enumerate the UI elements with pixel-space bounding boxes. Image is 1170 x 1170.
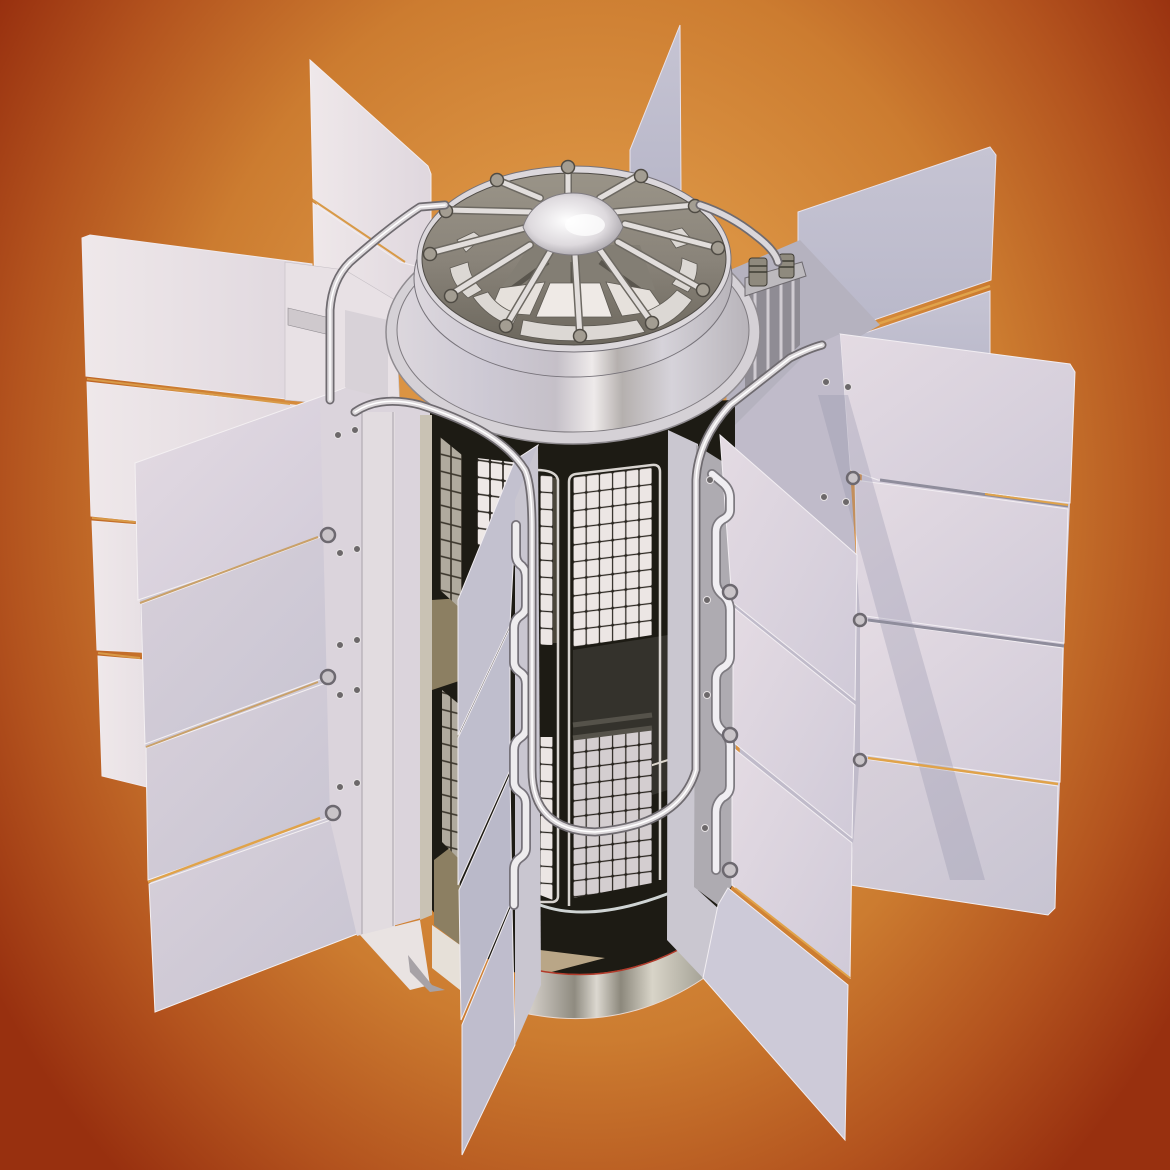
panel: left near fin: [135, 388, 432, 1012]
pipes: [330, 205, 822, 832]
battery grids: [440, 437, 700, 912]
panel: right near fin: [730, 334, 1075, 915]
left door: [458, 445, 541, 1155]
cylinder interior: [420, 400, 735, 985]
bottom ring: [519, 950, 704, 1019]
hub floor pieces: [450, 228, 697, 341]
panel: back top fin: [630, 25, 681, 200]
hub bolts: [424, 160, 724, 342]
panel: far-left fin: [82, 235, 400, 800]
dome: [523, 193, 623, 255]
hub spokes: [430, 165, 718, 336]
hub wall below dome: [500, 245, 655, 290]
right door and strip: [667, 430, 857, 1140]
small bolts: [334, 378, 852, 832]
panel: back right fin: [725, 147, 996, 450]
eyelets: [321, 472, 866, 877]
connector: back right plugs: [745, 254, 806, 296]
left base plinth: [360, 920, 460, 992]
top flange: [386, 166, 760, 444]
panel: back upper-left fin: [310, 60, 431, 350]
